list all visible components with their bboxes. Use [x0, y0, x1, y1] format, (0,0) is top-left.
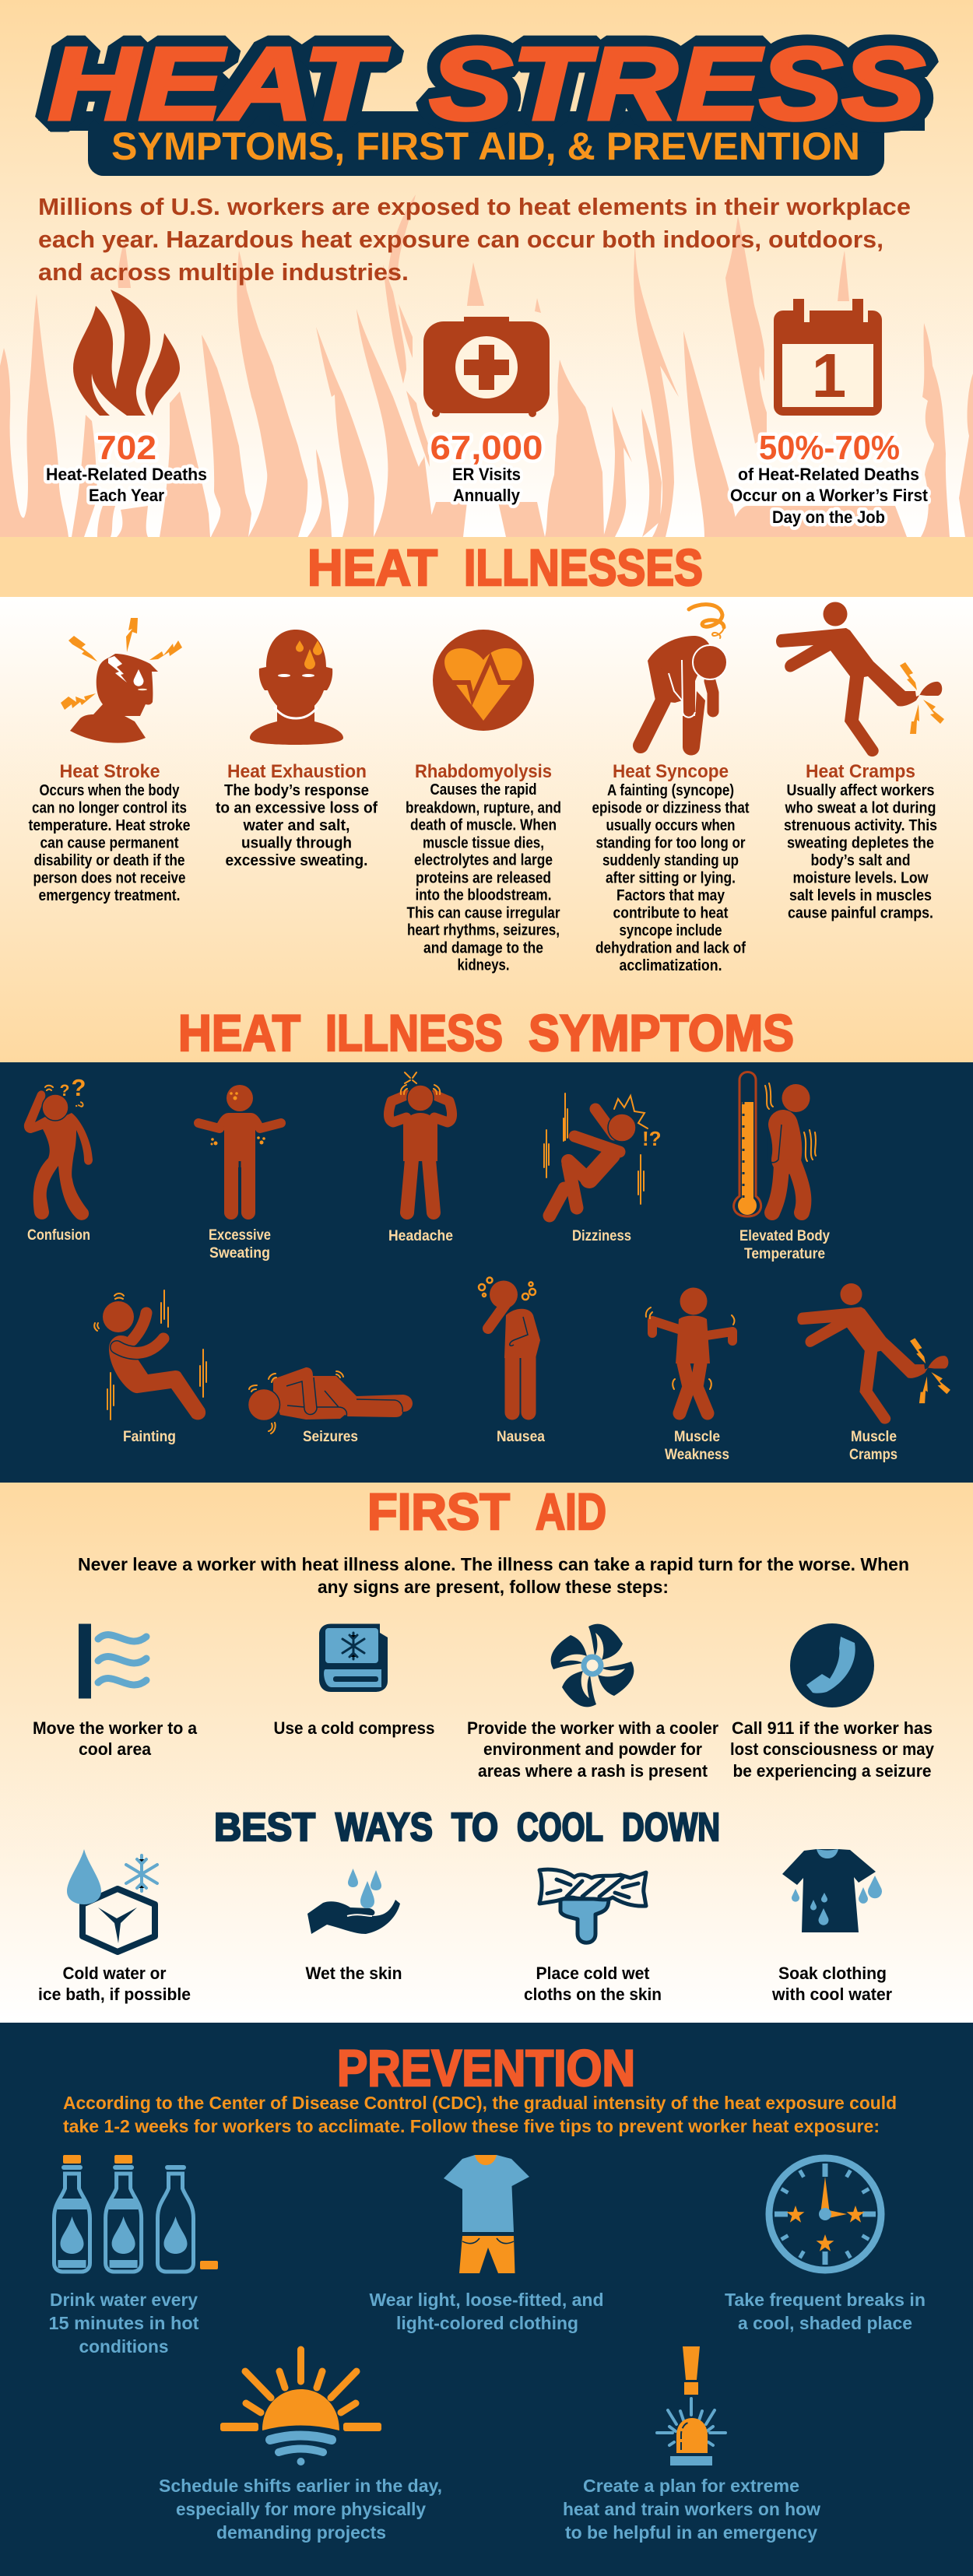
stat label: of Heat-Related Deaths [738, 465, 919, 484]
prevention intro [63, 2093, 897, 2136]
icon: hand with drops [307, 1869, 400, 1934]
icon: water bottles [54, 2155, 218, 2272]
label: Sweating [209, 1245, 270, 1262]
label: cool area [79, 1739, 152, 1759]
label [369, 2290, 604, 2333]
title block [48, 26, 925, 176]
label [739, 1228, 830, 1262]
description [216, 782, 378, 869]
description: proteins are released [416, 870, 551, 887]
icon: figure with leg cramp [776, 602, 944, 756]
symptom: seizures [248, 1367, 413, 1434]
description: The body’s response [224, 782, 369, 799]
step: call 911 [730, 1623, 935, 1781]
description: breakdown, rupture, and [406, 800, 561, 817]
description: who sweat a lot during [785, 800, 936, 817]
description: muscle tissue dies, [423, 834, 544, 851]
label [524, 1964, 662, 2004]
heading: best ways to cool down: BEST [214, 1805, 315, 1849]
heading: best ways to cool down: TO [451, 1805, 498, 1849]
description: after sitting or lying. [606, 870, 736, 887]
heading: heat illness symptoms: HEAT [178, 1004, 300, 1062]
icon: droplet, ice cube and snowflake [67, 1849, 157, 1952]
label: Muscle [851, 1429, 897, 1445]
description: suddenly standing up [602, 852, 739, 869]
symptom: confusion [24, 1074, 93, 1220]
label: Temperature [744, 1246, 825, 1262]
title backing plate [48, 111, 925, 176]
label: Wear light, loose-fitted, and [369, 2290, 604, 2310]
prevention intro: take 1-2 weeks for workers to acclimate. Follow these five tips to prevent worker heat exposure: [63, 2116, 880, 2136]
number: 50%-70%: 50%-70% [759, 429, 900, 467]
label [563, 2476, 820, 2543]
label: be experiencing a seizure [733, 1761, 931, 1781]
label: Dizziness [572, 1228, 631, 1244]
icon: exclamation and siren [657, 2346, 725, 2465]
heading: Heat Syncope [613, 761, 729, 782]
cool down: cold wet cloths [524, 1869, 662, 2004]
description: A fainting (syncope) [607, 782, 734, 799]
tip: frequent breaks [725, 2158, 926, 2333]
description: can cause permanent [40, 834, 179, 851]
heading: Heat Cramps [806, 761, 915, 782]
icon: flame [73, 290, 180, 416]
icon: twisted wet cloth [539, 1869, 646, 1943]
description: standing for too long or [596, 834, 746, 851]
description: body’s salt and [811, 852, 911, 869]
icon: wall with air waves [79, 1623, 146, 1698]
description: water and salt, [243, 817, 350, 834]
symptom: nausea [479, 1278, 540, 1413]
symptom: muscle weakness [646, 1287, 734, 1413]
heading: first aid [367, 1483, 606, 1540]
stat label [452, 465, 521, 505]
label: Cramps [849, 1447, 897, 1463]
description: usually occurs when [606, 817, 735, 834]
symptom: dizziness: !? [642, 1127, 662, 1150]
first aid intro: any signs are present, follow these steps: [318, 1577, 669, 1597]
description: contribute to heat [613, 904, 729, 921]
label: Create a plan for extreme [583, 2476, 799, 2496]
description: dehydration and lack of [595, 940, 746, 957]
label: Move the worker to a [33, 1718, 198, 1738]
description: and damage to the [423, 940, 543, 957]
description: disability or death if the [34, 852, 185, 869]
stat label: Each Year [89, 486, 164, 505]
intro paragraph [38, 193, 911, 286]
label: areas where a rash is present [478, 1761, 708, 1781]
label: Confusion [27, 1227, 90, 1244]
label: conditions [79, 2336, 168, 2357]
description: can no longer control its [32, 800, 187, 817]
label: Schedule shifts earlier in the day, [159, 2476, 442, 2496]
stat label: ER Visits [452, 465, 521, 484]
symptom: confusion: ? [60, 1082, 69, 1100]
label [849, 1429, 897, 1463]
symptom: elevated body temperature [734, 1072, 816, 1216]
label: lost consciousness or may [730, 1739, 935, 1759]
description: episode or dizziness that [592, 800, 750, 817]
label: ice bath, if possible [38, 1985, 191, 2004]
label: a cool, shaded place [738, 2313, 912, 2333]
label [48, 2290, 199, 2357]
label: demanding projects [216, 2522, 386, 2543]
icon: clock [769, 2158, 881, 2270]
title: HEAT STRESS [48, 26, 925, 141]
symptom: excessive sweating [198, 1085, 281, 1220]
number: 67,000: 67,000 [430, 429, 543, 467]
cool down: ice bath [38, 1849, 191, 2004]
label: 15 minutes in hot [48, 2313, 199, 2333]
icon: head with bolts [61, 618, 182, 743]
tip: emergency plan [563, 2346, 820, 2543]
description [592, 782, 750, 974]
description: usually through [241, 834, 352, 851]
intro paragraph: each year. Hazardous heat exposure can occur both indoors, outdoors, [38, 226, 883, 253]
number: 702: 702 [97, 429, 156, 467]
label: to be helpful in an emergency [565, 2522, 817, 2543]
description: death of muscle. When [410, 817, 557, 834]
label: environment and powder for [483, 1739, 702, 1759]
icon: sweating head [250, 630, 343, 745]
heading: best ways to cool down: WAYS [335, 1805, 433, 1849]
label: Soak clothing [778, 1964, 887, 1983]
description: syncope include [620, 922, 722, 939]
icon: shirt and shorts [444, 2155, 529, 2273]
first aid intro [78, 1554, 909, 1597]
label: Seizures [303, 1429, 358, 1445]
tip: light clothing [369, 2155, 604, 2333]
description: kidneys. [458, 957, 509, 974]
intro paragraph: Millions of U.S. workers are exposed to heat elements in their workplace [38, 193, 911, 220]
cool down: soak clothing [771, 1849, 892, 2004]
stat: 702 deaths [46, 290, 207, 505]
label [771, 1964, 892, 2004]
heading: heat illness symptoms: SYMPTOMS [529, 1004, 794, 1062]
panel: heat cramps [776, 602, 944, 921]
stat label: Annually [453, 486, 521, 505]
label: Excessive [209, 1227, 271, 1244]
description: electrolytes and large [414, 851, 553, 869]
panel: heat syncope [592, 605, 750, 974]
description: Causes the rapid [430, 781, 537, 798]
icon: thermometer [734, 1072, 761, 1216]
title: HEAT STRESS: HEAT [48, 26, 388, 141]
icon: fan [551, 1624, 634, 1707]
label: Muscle [674, 1429, 720, 1445]
description: salt levels in muscles [789, 887, 932, 904]
heading: heat illnesses [307, 539, 703, 596]
heading: first aid: FIRST [367, 1483, 510, 1540]
stat label: Occur on a Worker’s First [730, 486, 929, 505]
description: temperature. Heat stroke [28, 817, 190, 834]
subtitle: SYMPTOMS, FIRST AID, & PREVENTION [111, 125, 860, 168]
description: Occurs when the body [39, 782, 180, 799]
label [467, 1718, 718, 1781]
label [730, 1718, 935, 1781]
stat label: Day on the Job [772, 507, 885, 527]
symptom: confusion: ? [72, 1100, 86, 1111]
label [209, 1227, 271, 1262]
stat label [730, 465, 929, 527]
label [665, 1429, 729, 1463]
description: Usually affect workers [786, 782, 934, 799]
icon: cold compress [319, 1623, 388, 1692]
label: heat and train workers on how [563, 2499, 820, 2519]
heading: best ways to cool down: DOWN [622, 1805, 720, 1849]
prevention intro: According to the Center of Disease Control (CDC), the gradual intensity of the heat exposure could [63, 2093, 897, 2113]
label: especially for more physically [176, 2499, 426, 2519]
label: Headache [388, 1228, 453, 1244]
label: Nausea [497, 1429, 545, 1445]
label: Use a cold compress [274, 1718, 434, 1738]
label [725, 2290, 926, 2333]
title: HEAT STRESS: STRESS [430, 26, 925, 141]
description: into the bloodstream. [416, 887, 551, 904]
icon: calendar [774, 299, 882, 416]
label: Elevated Body [739, 1228, 830, 1244]
heading: heat illnesses: ILLNESSES [464, 539, 703, 596]
step: cooler environment [467, 1624, 718, 1781]
heading: Heat Exhaustion [227, 761, 367, 782]
label: light-colored clothing [396, 2313, 578, 2333]
stat label: Heat-Related Deaths [46, 465, 207, 484]
description: sweating depletes the [787, 834, 934, 851]
icon: heart with pulse [433, 630, 534, 731]
symptom: fainting [94, 1290, 206, 1420]
intro paragraph: and across multiple industries. [38, 258, 409, 286]
panel: heat exhaustion [216, 630, 378, 869]
description: emergency treatment. [39, 887, 181, 904]
heading: best ways to cool down: COOL [517, 1805, 603, 1849]
icon: dizzy bent figure [641, 605, 727, 755]
symptom: confusion: ? [72, 1074, 86, 1101]
first aid intro: Never leave a worker with heat illness alone. The illness can take a rapid turn for the worse. When [78, 1554, 909, 1574]
description: Factors that may [616, 887, 725, 904]
heading: heat illness symptoms [178, 1004, 794, 1062]
description: strenuous activity. This [784, 817, 937, 834]
label: with cool water [771, 1985, 892, 2004]
symptom: dizziness [544, 1093, 662, 1216]
step: cool area [33, 1623, 198, 1759]
icon: calendar: 1 [812, 341, 846, 410]
cool down: wet the skin [305, 1869, 402, 1983]
tip: schedule earlier shifts [159, 2350, 442, 2543]
label: Wet the skin [305, 1964, 402, 1983]
heading: heat illness symptoms: ILLNESS [325, 1004, 503, 1062]
stat: 67,000 ER visits [423, 317, 550, 505]
label: Provide the worker with a cooler [467, 1718, 718, 1738]
symptom: muscle cramps [797, 1283, 950, 1424]
icon: phone [790, 1623, 874, 1707]
description: heart rhythms, seizures, [407, 921, 560, 939]
label: Take frequent breaks in [725, 2290, 926, 2310]
icon: soaked shirt [782, 1849, 882, 1932]
label: Drink water every [50, 2290, 198, 2310]
label [159, 2476, 442, 2543]
description [784, 782, 937, 921]
description: to an excessive loss of [216, 800, 378, 817]
label: cloths on the skin [524, 1985, 662, 2004]
description: person does not receive [33, 870, 185, 887]
heading: prevention: PREVENTION [337, 2039, 635, 2097]
stat: 50%-70% first day [730, 299, 929, 527]
panel: heat stroke [28, 618, 190, 904]
tip: drink water [48, 2155, 218, 2357]
description: cause painful cramps. [788, 904, 933, 921]
icon: first aid kit [423, 317, 550, 417]
description: This can cause irregular [406, 904, 560, 921]
symptom: headache [388, 1072, 452, 1213]
heading: heat illnesses: HEAT [307, 539, 437, 596]
step: cold compress [274, 1623, 434, 1738]
panel: symptoms [24, 1072, 950, 1463]
label: Place cold wet [536, 1964, 650, 1983]
label [38, 1964, 191, 2004]
heading: best ways to cool down [214, 1805, 720, 1849]
title: HEAT STRESS: STRESS [430, 26, 925, 141]
description [406, 781, 561, 974]
description [28, 782, 190, 904]
title: HEAT STRESS: HEAT [48, 26, 388, 141]
label: Cold water or [62, 1964, 167, 1983]
stat label [46, 465, 207, 505]
label: Call 911 if the worker has [732, 1718, 933, 1738]
heading: first aid: AID [536, 1483, 606, 1540]
panel: rhabdomyolysis [406, 630, 561, 974]
icon: sunrise [220, 2350, 381, 2465]
label: Fainting [123, 1429, 176, 1445]
description: excessive sweating. [226, 852, 367, 869]
description: moisture levels. Low [792, 870, 929, 887]
heading: Rhabdomyolysis [415, 761, 552, 782]
label [33, 1718, 198, 1759]
heading: Heat Stroke [59, 761, 160, 782]
label: Weakness [665, 1447, 729, 1463]
description: acclimatization. [620, 957, 722, 974]
